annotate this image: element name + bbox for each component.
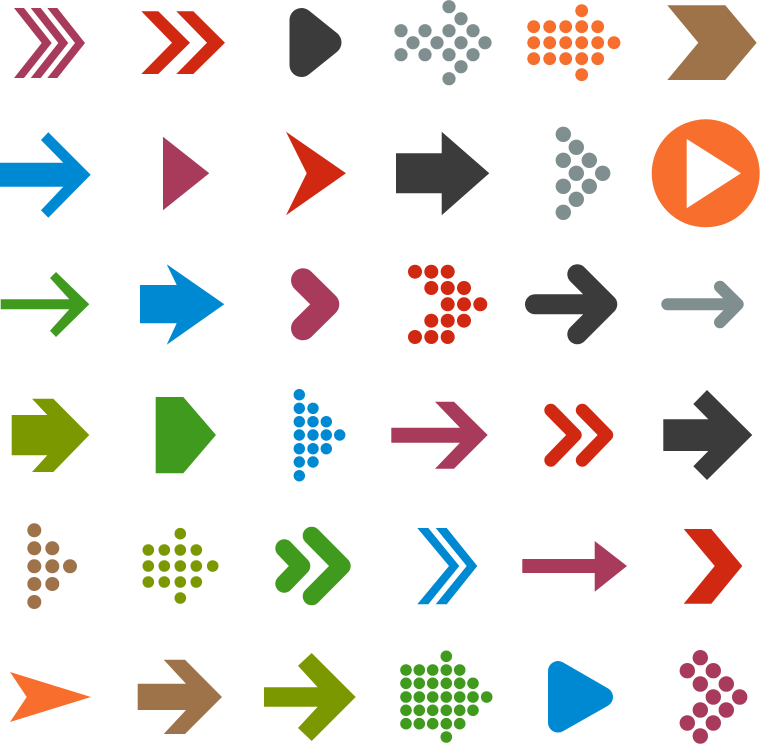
icon: rounded maroon chevron: [303, 280, 327, 328]
icon: orange dotted arrow: [527, 4, 620, 81]
icon: double red chevron: [141, 11, 225, 74]
icon: brown block arrow: [138, 660, 222, 734]
icon: dark block arrow: [396, 132, 489, 215]
icon: brown chevron: [667, 5, 757, 80]
icon: rounded blue triangle: [558, 671, 603, 722]
icon: green house arrow: [156, 397, 216, 473]
icon: orange arrowhead: [10, 672, 91, 722]
icon: olive dotted arrow: [142, 528, 218, 604]
icon: maroon dotted chevron: [680, 650, 747, 744]
icon: rounded grey arrow: [667, 287, 738, 322]
icon: red arrowhead: [286, 132, 346, 215]
icon: red chevron: [684, 529, 742, 604]
icon: dark angled arrow: [663, 390, 752, 480]
icon: orange play button: [652, 119, 760, 227]
icon: rounded green double chevron: [284, 536, 342, 596]
icon: maroon triangle: [163, 137, 209, 210]
icon: rounded dark triangle: [302, 20, 330, 65]
icon: triple maroon chevron: [14, 8, 85, 78]
icon: brown dotted triangle: [27, 523, 77, 609]
icon: green dotted arrow: [400, 650, 493, 743]
icon: rounded red double chevron: [551, 410, 607, 460]
icon: blue line arrow: [0, 132, 91, 218]
icon: blue double chevron: [417, 528, 477, 604]
icon: olive block arrow: [12, 399, 89, 472]
icon: blue dotted triangle: [294, 389, 345, 481]
icon: rounded dark arrow: [535, 274, 607, 334]
icon: blue swept arrow: [140, 264, 224, 345]
icon: maroon wide-head arrow: [391, 402, 488, 469]
icon: maroon long arrow: [522, 541, 627, 592]
icon: green thin arrow: [1, 272, 89, 337]
icon: grey dotted triangle: [556, 127, 610, 220]
icon: grey dotted arrow: [394, 0, 492, 85]
icon: red dotted chevron: [408, 265, 487, 344]
icon: olive angled arrow: [264, 653, 356, 741]
